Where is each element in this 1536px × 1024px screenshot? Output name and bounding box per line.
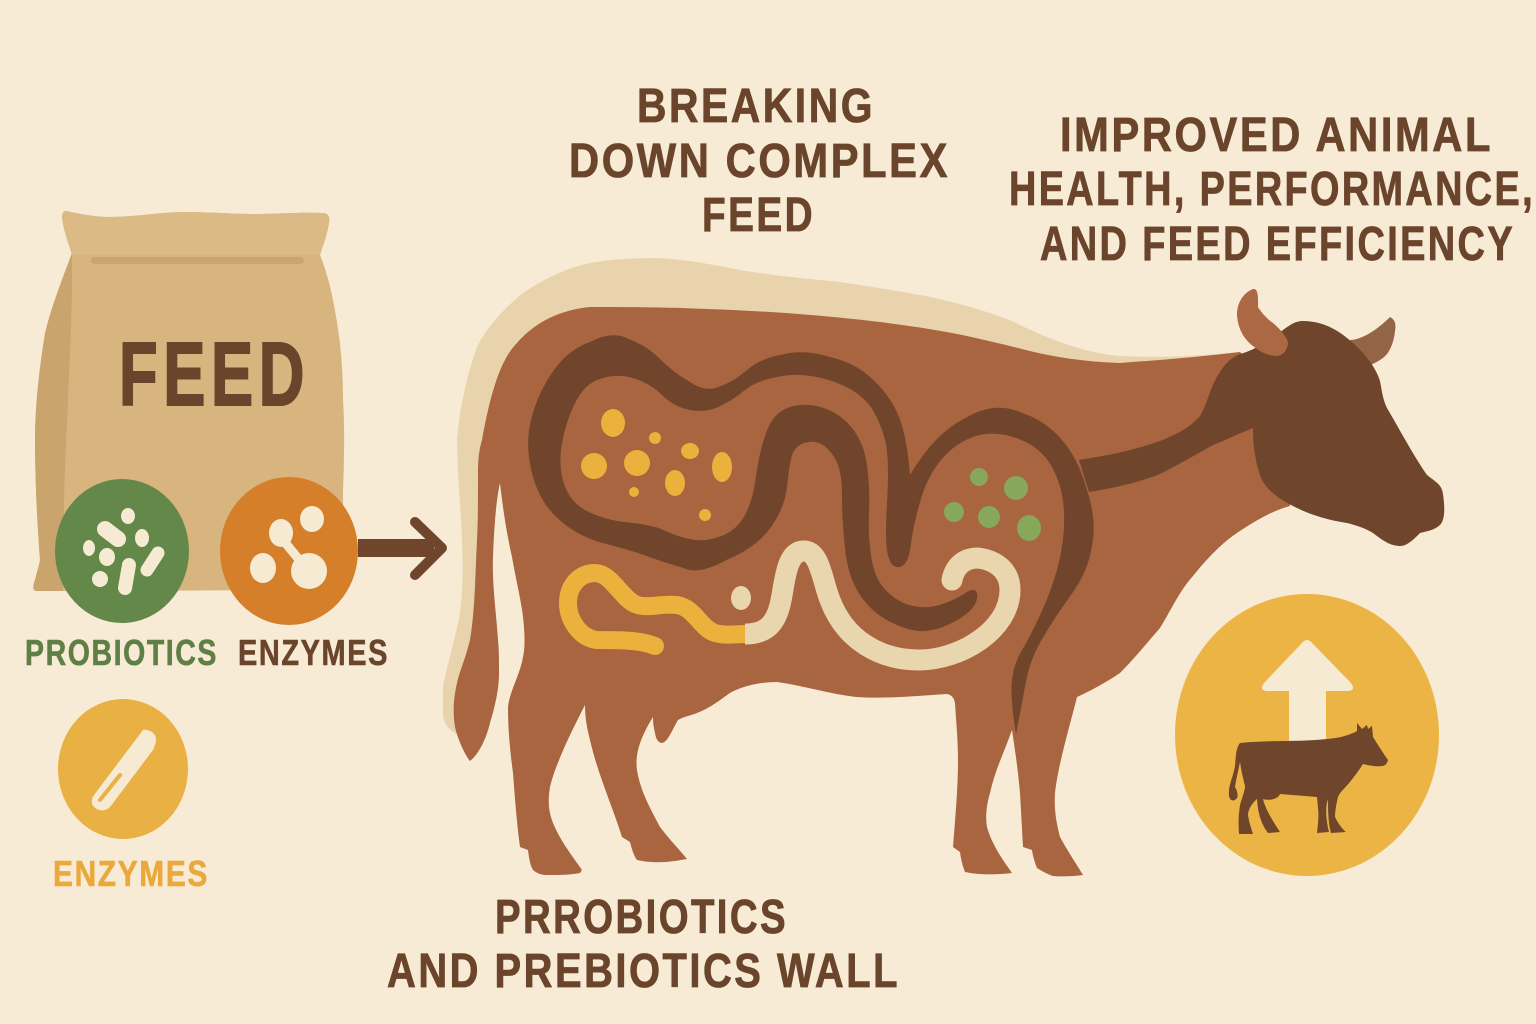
panel: improved performance badge: [1175, 594, 1439, 876]
small intestine yellow section: [568, 573, 745, 655]
left horn: [1237, 289, 1288, 356]
label: lower enzymes: ENZYMES: [53, 853, 209, 894]
up arrow: [1262, 640, 1353, 742]
cow back shadow: [443, 258, 1240, 740]
heading: breaking down complex feed: BREAKING: [637, 80, 875, 133]
small intestine cream section: [745, 551, 1010, 660]
bag label: FEED: [119, 325, 310, 425]
cream particle: [731, 586, 751, 610]
stomach and intestine dark tract: [528, 335, 1094, 734]
heading: probiotics and prebiotics wall: PRROBIOTICS: [495, 891, 788, 944]
panel: cow illustration: [443, 258, 1444, 876]
cow body: [454, 307, 1290, 876]
heading: breaking down complex feed: DOWN COMPLEX: [569, 135, 950, 188]
heading: probiotics and prebiotics wall: AND PREBIOTICS WALL: [387, 945, 900, 998]
bag top band: [62, 211, 329, 255]
yellow feed particles: [581, 409, 732, 521]
arrow: feed to cow: [358, 522, 442, 575]
bag side fold: [33, 253, 72, 591]
heading: probiotics and prebiotics wall: [387, 891, 900, 998]
icon: enzymes circle: [220, 477, 358, 625]
right horn: [1350, 317, 1395, 366]
heading: breaking down complex feed: FEED: [702, 189, 815, 242]
label: probiotics: PROBIOTICS: [25, 632, 218, 673]
icon: probiotics circle: [55, 479, 189, 623]
heading: breaking down complex feed: [569, 80, 950, 242]
label: enzymes: ENZYMES: [238, 632, 389, 673]
heading: improved animal health: [1009, 109, 1535, 271]
icon: yellow enzyme circle: [58, 699, 188, 839]
bag seam: [91, 257, 304, 264]
green microbes: [944, 468, 1041, 541]
bag body: [33, 211, 344, 591]
panel: feed bag: [33, 211, 344, 591]
head and neck: [1079, 321, 1444, 546]
small cow silhouette: [1229, 723, 1388, 834]
badge circle: [1175, 594, 1439, 876]
